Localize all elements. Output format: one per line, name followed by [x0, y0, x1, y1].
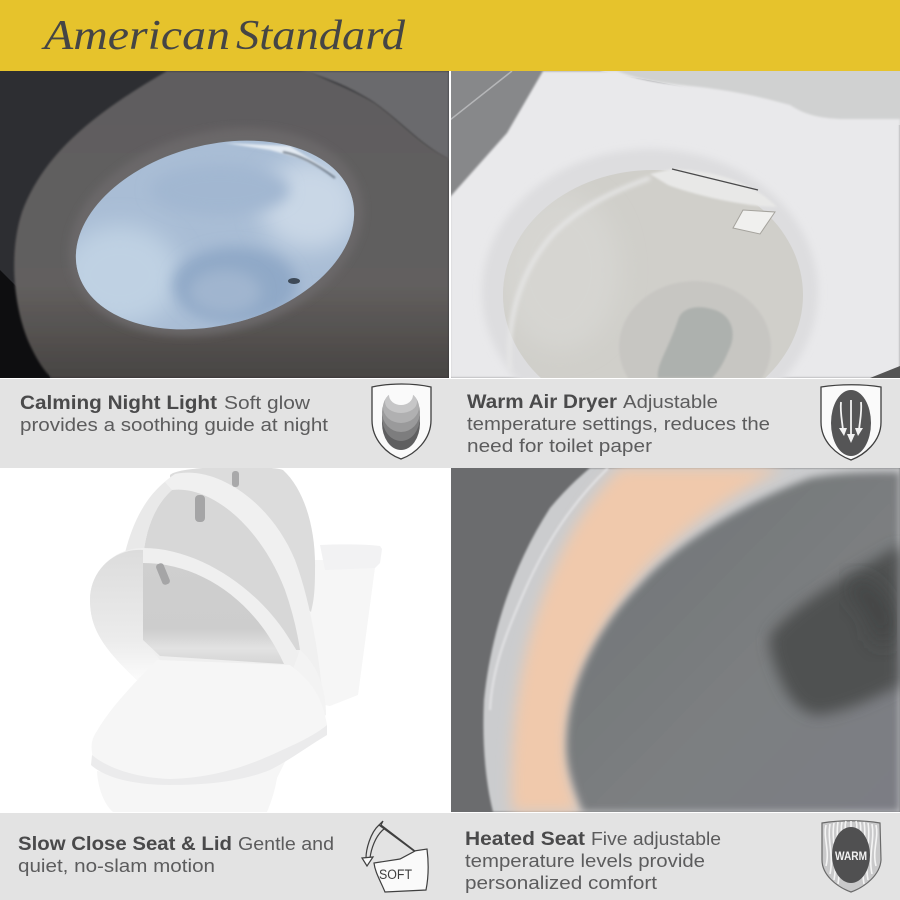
- caption: slow close seat and lid: quiet, no-slam motion: [18, 855, 215, 876]
- caption band: top: [0, 379, 900, 468]
- logo: American Standard: Standard: [236, 13, 406, 59]
- caption: calming night light: provides a soothing guide at night: [20, 414, 328, 435]
- icon: warm shield: [822, 821, 881, 892]
- caption: heated seat: personalized comfort: [465, 872, 657, 893]
- caption: warm air dryer: temperature settings, reduces the: [467, 413, 770, 434]
- warm glow: [511, 468, 783, 812]
- caption: warm air dryer: Warm Air Dryer Adjustable: [467, 391, 709, 413]
- dryer housing: [650, 169, 777, 207]
- rim highlight: [490, 468, 608, 710]
- lid, low position: [90, 548, 296, 678]
- photo: heated seat: [451, 468, 900, 812]
- caption: slow close seat and lid: Slow Close Seat & Lid Gentle and: [18, 833, 329, 855]
- bowl: [567, 472, 900, 812]
- icon: night light shield: [372, 384, 431, 459]
- tank: [310, 544, 382, 706]
- closed seat: [92, 679, 327, 776]
- bowl: [503, 170, 803, 378]
- header band: [0, 0, 900, 71]
- seat: [14, 71, 449, 378]
- icon: warm shield: WARM: [835, 849, 867, 863]
- seat inner rim: [484, 151, 816, 378]
- icon: air dryer shield: [821, 385, 881, 460]
- seat highlight ring: [72, 130, 360, 338]
- hinge area: [322, 704, 326, 716]
- logo: American Standard: [41, 13, 406, 59]
- icon: soft close: [362, 821, 428, 892]
- icon: soft close: SOFT: [379, 867, 412, 882]
- water: [620, 282, 770, 378]
- bowl: [97, 758, 287, 812]
- tank: [600, 71, 900, 125]
- caption: heated seat: temperature levels provide: [465, 850, 705, 871]
- lid, raised position: [170, 467, 315, 612]
- photo: calming night light: [0, 71, 449, 378]
- photo: slow close seat and lid: [90, 468, 382, 812]
- caption: calming night light: Calming Night Light Soft glow: [20, 392, 300, 414]
- left rim highlight: [508, 176, 650, 339]
- logo: American Standard: American: [41, 13, 230, 59]
- nozzle: [733, 210, 775, 234]
- glowing bowl: [76, 140, 354, 330]
- seat: [450, 71, 900, 378]
- tank behind seat: [300, 71, 449, 160]
- caption band: bottom: [0, 813, 900, 900]
- seat rim: [483, 468, 900, 812]
- caption: heated seat: Heated Seat Five adjustable: [465, 828, 715, 850]
- lid, mid position: [126, 471, 310, 654]
- drain: [770, 545, 900, 715]
- photo: warm air dryer: [451, 71, 900, 378]
- caption: warm air dryer: need for toilet paper: [467, 435, 652, 456]
